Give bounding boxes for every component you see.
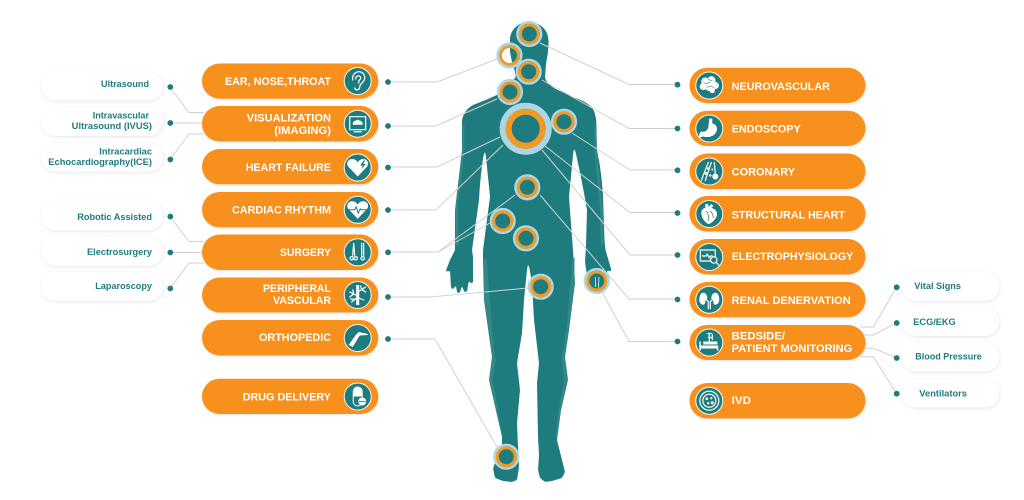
sub-label: Vital Signs (902, 272, 999, 301)
target ring: abdomen left (491, 209, 514, 233)
connector dots: left column (385, 79, 391, 342)
sub-label: Laparoscopy: Laparoscopy (95, 280, 153, 291)
target ring: throat (517, 60, 540, 84)
pill: Visualization (Imaging): VISUALIZATION (247, 112, 331, 124)
human body silhouette (445, 22, 612, 482)
pill: Structural Heart (690, 196, 866, 232)
icon: stomach (696, 115, 723, 142)
target ring: ankle (494, 445, 518, 469)
pill: Ear, Nose, Throat (202, 64, 378, 99)
sub-label: Electrosurgery: Electrosurgery (87, 246, 153, 257)
sub-label: ECG/EKG (902, 307, 999, 336)
pill: Structural Heart: STRUCTURAL HEART (732, 210, 845, 222)
sub-label: Robotic Assisted (41, 201, 163, 230)
pill: Electrophysiology: ELECTROPHYSIOLOGY (732, 251, 854, 263)
icon: imaging monitor (344, 110, 371, 137)
pill: Electrophysiology (690, 239, 866, 274)
connector lines to right sub-labels (860, 287, 897, 394)
sub-label: Ventilators (902, 379, 999, 408)
sub-label: Laparoscopy (41, 272, 163, 301)
pill: Coronary: CORONARY (732, 167, 796, 179)
connector lines from body to right labels (540, 43, 677, 342)
sub-label: Ventilators: Ventilators (919, 387, 967, 398)
pill: Peripheral Vascular (202, 278, 378, 312)
target ring: abdomen centre (514, 226, 538, 250)
target ring: ear (498, 44, 521, 67)
target ring: wrist (585, 269, 608, 293)
pill: Orthopedic (202, 320, 378, 356)
pill: IVD: IVD (732, 395, 751, 407)
icon: hospital bed (696, 329, 723, 356)
connector lines to left sub-labels (170, 87, 204, 288)
pill: Ear, Nose, Throat: EAR, NOSE,THROAT (225, 76, 331, 88)
pill: Heart Failure (202, 149, 378, 184)
target ring: heart (503, 106, 549, 152)
sub-label: Intracardiac Echocardiography(ICE): Echocardiography(ICE) (48, 156, 152, 167)
pill: Orthopedic: ORTHOPEDIC (259, 332, 331, 344)
target ring: neck and shoulder (498, 80, 522, 104)
icon: artery with cells (696, 158, 723, 185)
pill: Endoscopy (690, 111, 866, 146)
icon: petri dish (696, 387, 723, 414)
sub-label: Blood Pressure: Blood Pressure (915, 350, 982, 361)
icon: monitor with magnifier (696, 244, 723, 270)
icon: branching vessels (344, 282, 371, 308)
pill: Neurovascular (690, 68, 866, 103)
pill: Renal Denervation (690, 282, 866, 317)
target ring: chest (552, 110, 576, 134)
icon: surgical tools (344, 239, 371, 266)
connector dots: right sub-labels (894, 284, 900, 397)
sub-label: ECG/EKG: ECG/EKG (913, 316, 956, 327)
sub-label: Ultrasound: Ultrasound (101, 78, 149, 89)
pill: Bedside / Patient Monitoring: PATIENT MONITORING (732, 343, 852, 355)
icon: heart with pulse (344, 196, 371, 223)
target ring: kidneys (516, 176, 539, 199)
sub-label: Intravascular Ultrasound (IVUS): Intravascular (93, 109, 149, 120)
pill: Visualization (Imaging): (IMAGING) (274, 125, 331, 137)
icon: brain (696, 72, 723, 99)
connector lines from body to left labels (388, 59, 528, 447)
pill: Neurovascular: NEUROVASCULAR (732, 81, 830, 93)
icon: anatomical heart (696, 200, 723, 228)
pill: Peripheral Vascular: PERIPHERAL (263, 283, 331, 295)
target ring: head (518, 22, 541, 46)
connector dots: left sub-labels (167, 84, 173, 291)
pill: Cardiac Rhythm (202, 192, 378, 227)
target ring: thigh (529, 275, 552, 299)
pill: Renal Denervation: RENAL DENERVATION (732, 295, 851, 307)
pill: Peripheral Vascular: VASCULAR (273, 295, 331, 307)
pill: Drug Delivery (202, 379, 378, 414)
icon: ear (344, 68, 371, 94)
icon: broken heart (344, 154, 371, 181)
sub-label: Intravascular Ultrasound (IVUS) (41, 107, 163, 136)
pill: Bedside / Patient Monitoring (690, 325, 866, 360)
sub-label: Vital Signs: Vital Signs (914, 280, 961, 291)
sub-label: Intravascular Ultrasound (IVUS): Ultrasound (IVUS) (72, 120, 152, 131)
icon: bone drill (344, 324, 371, 352)
pill: IVD (690, 383, 866, 418)
sub-label: Electrosurgery (41, 236, 163, 266)
connector dots: right column (675, 82, 680, 344)
pill: Surgery: SURGERY (280, 247, 332, 259)
pill: Visualization (Imaging) (202, 106, 378, 142)
sub-label: Intracardiac Echocardiography(ICE) (41, 143, 163, 172)
pill: Heart Failure: HEART FAILURE (246, 162, 331, 174)
sub-label: Blood Pressure (902, 342, 999, 372)
sub-label: Ultrasound (41, 72, 163, 100)
pill: Bedside / Patient Monitoring: BEDSIDE/ (732, 330, 785, 342)
sub-label: Intracardiac Echocardiography(ICE): Intracardiac (99, 145, 152, 156)
pill: Drug Delivery: DRUG DELIVERY (243, 392, 332, 404)
pill: Surgery (202, 234, 378, 270)
pill: Cardiac Rhythm: CARDIAC RHYTHM (232, 204, 331, 216)
sub-label: Robotic Assisted: Robotic Assisted (77, 211, 152, 222)
icon: capsule and pill (344, 383, 371, 410)
pill: Coronary (690, 154, 866, 189)
icon: kidneys (696, 286, 723, 313)
pill: Endoscopy: ENDOSCOPY (732, 124, 801, 136)
